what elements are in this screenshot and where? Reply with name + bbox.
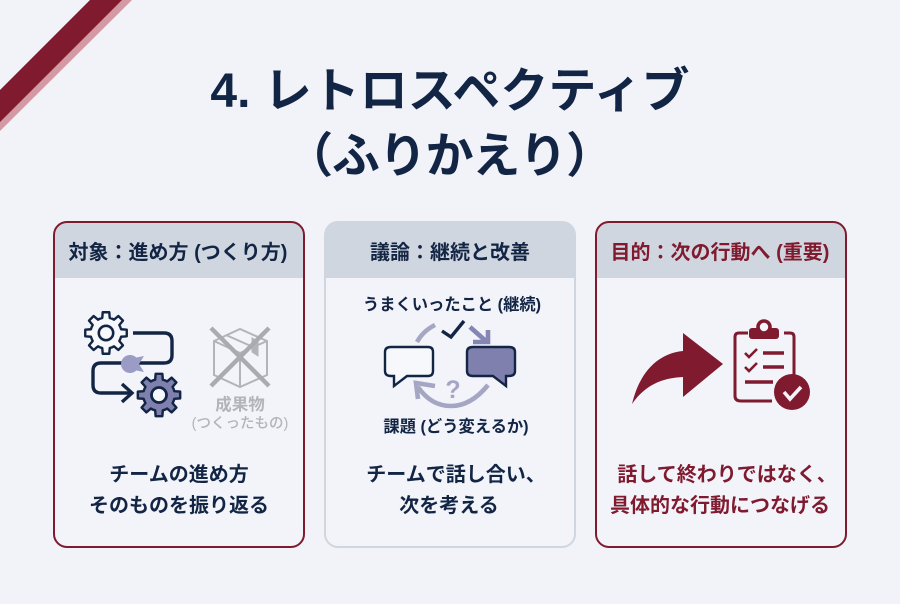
icon: right speech bubble xyxy=(467,347,515,386)
caption: purpose: 話して終わりではなく、 xyxy=(617,463,837,486)
title xyxy=(210,65,690,183)
caption: target: チームの進め方 xyxy=(109,463,249,486)
panel: target xyxy=(54,222,304,547)
label: issues: 課題 (どう変えるか) xyxy=(383,417,529,436)
icon: check mark xyxy=(442,321,464,337)
caption: discussion: 次を考える xyxy=(399,494,499,517)
icon: filled gear xyxy=(138,374,180,416)
icon: outline gear xyxy=(85,312,127,354)
caption: discussion xyxy=(366,463,546,517)
caption: purpose xyxy=(610,463,837,517)
title: （ふりかえり） xyxy=(285,130,613,183)
icon: process loop with gears xyxy=(85,312,180,416)
icon: question mark: ? xyxy=(445,376,461,404)
icon: left speech bubble xyxy=(385,347,433,386)
caption: purpose: 具体的な行動につなげる xyxy=(610,494,830,517)
label: what went well: うまくいったこと (継続) xyxy=(363,296,541,314)
caption: target xyxy=(89,463,269,517)
caption: target: そのものを振り返る xyxy=(89,494,269,517)
label: deliverables: 成果物 xyxy=(215,394,265,414)
icon: forward arrow xyxy=(632,333,723,404)
panel heading: purpose: 目的：次の行動へ (重要) xyxy=(611,241,829,264)
icon: discussion cycle xyxy=(385,321,515,406)
caption: discussion: チームで話し合い、 xyxy=(366,463,546,486)
panel: discussion xyxy=(325,222,575,547)
title: 4. レトロスペクティブ xyxy=(210,65,690,118)
panel: purpose xyxy=(596,222,846,547)
label: deliverables: (つくったもの) xyxy=(192,415,288,432)
panel heading: target: 対象：進め方 (つくり方) xyxy=(69,240,287,264)
label: deliverables xyxy=(192,394,288,432)
icon: top cycle arrows xyxy=(417,325,488,342)
icon: bottom cycle arrow xyxy=(416,383,488,406)
corner ribbon xyxy=(0,0,132,131)
icon: loop dot xyxy=(121,355,144,373)
icon: clipboard checklist xyxy=(735,321,810,410)
panel heading: discussion: 議論：継続と改善 xyxy=(370,241,530,264)
icon: crossed-out box xyxy=(211,328,269,387)
